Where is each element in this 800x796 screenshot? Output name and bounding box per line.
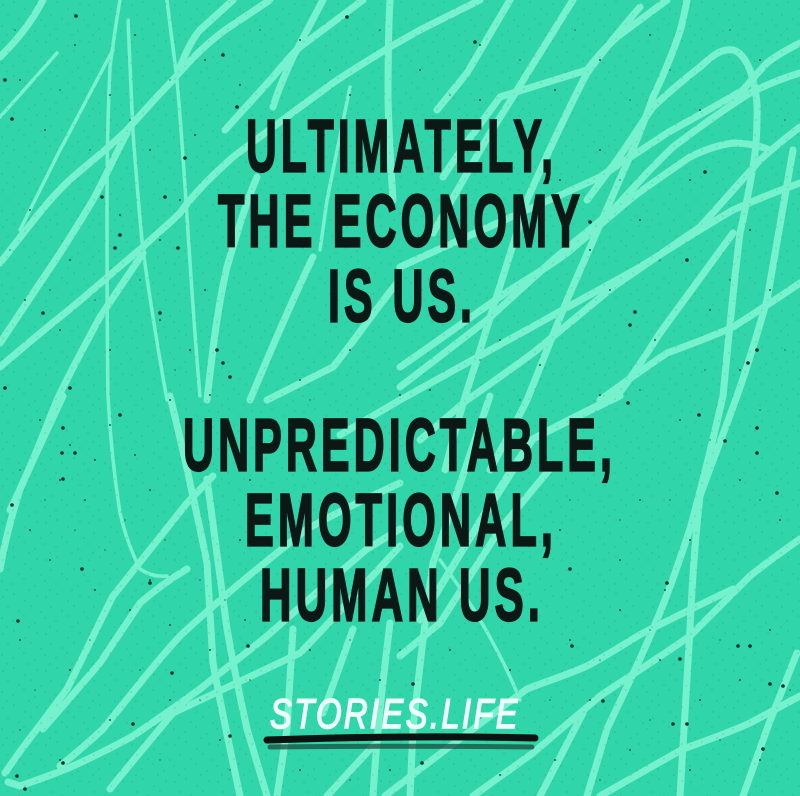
logo: stories.life <box>267 690 535 747</box>
main quote <box>183 104 616 636</box>
logo wordmark: STORIES.LIFE <box>270 690 520 737</box>
line: IS US.: IS US. <box>328 254 476 338</box>
logo brush underline <box>267 737 535 747</box>
line: EMOTIONAL,: EMOTIONAL, <box>245 478 557 562</box>
line: HUMAN US.: HUMAN US. <box>260 554 544 636</box>
line: ULTIMATELY,: ULTIMATELY, <box>246 104 557 188</box>
